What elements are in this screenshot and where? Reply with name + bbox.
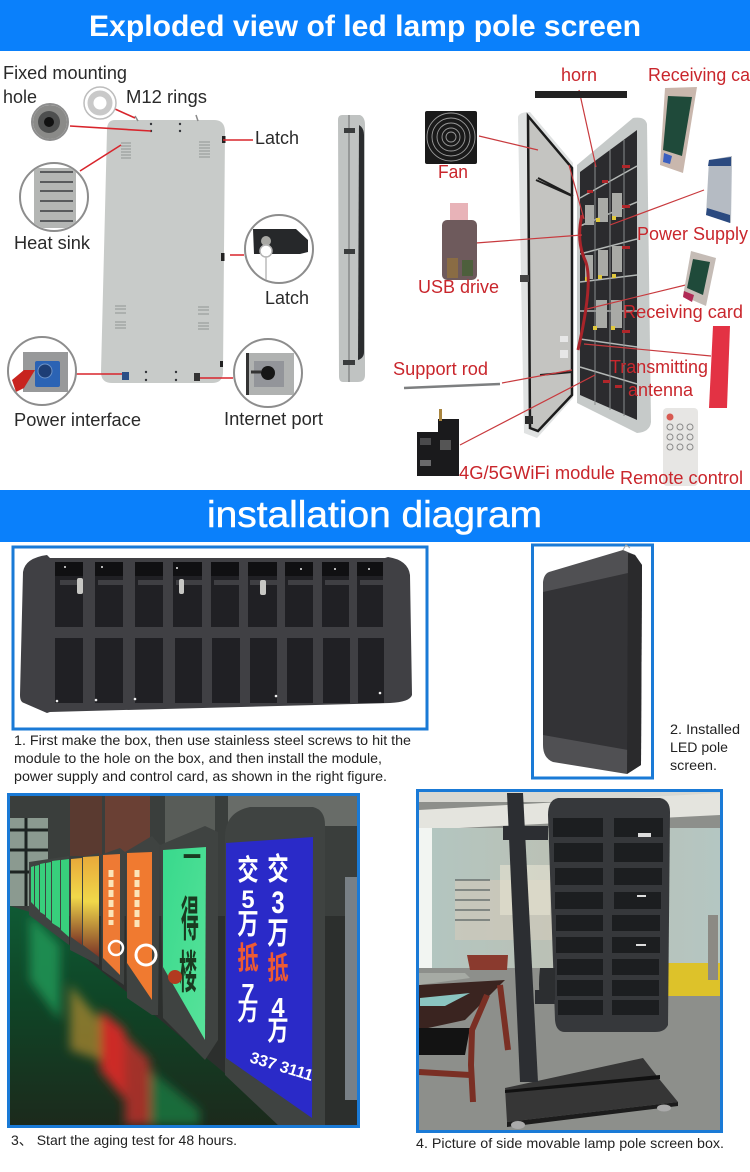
label: latch lower: Latch — [265, 287, 309, 308]
right panel with modules — [577, 118, 651, 433]
panel: opened cabinet with components — [393, 64, 750, 488]
header: exploded view — [0, 0, 750, 51]
far right edge strip — [345, 877, 357, 1100]
panel: back view of cabinet with callouts — [3, 62, 365, 430]
side view of cabinet — [338, 115, 365, 382]
component: fan — [425, 111, 477, 164]
blue screen: 交 — [237, 855, 259, 887]
label: WiFi module: 4G/5GWiFi module — [459, 462, 615, 483]
label: horn: horn — [561, 64, 597, 85]
blue screen: 3 — [271, 885, 285, 920]
caption: step 1: 1. First make the box, then use stainless steel screws to hit the — [14, 732, 411, 748]
label: heat sink: Heat sink — [14, 232, 91, 253]
caption: step 2: screen. — [670, 757, 717, 773]
panel: step 1 empty box photo — [13, 547, 427, 729]
label: remote control: Remote control — [620, 467, 743, 488]
label: antenna: antenna — [628, 379, 694, 400]
blue screen: 5 — [241, 886, 255, 914]
caption: step 1: power supply and control card, as shown in the right figure. — [14, 768, 387, 784]
blue screen — [226, 837, 315, 1118]
component: remote control — [663, 408, 698, 486]
label: hole: hole — [3, 86, 37, 107]
label: internet port: Internet port — [224, 408, 323, 429]
back housing — [101, 115, 226, 383]
office background — [419, 792, 720, 996]
wheeled base — [505, 1058, 678, 1129]
component: receiving card middle — [683, 251, 716, 306]
green screen: 得 — [181, 892, 199, 947]
callout lines — [70, 109, 253, 378]
component: receiving card top — [660, 87, 697, 173]
icon: M12 ring — [84, 87, 116, 119]
component: transmitting antenna — [709, 326, 730, 408]
label: power interface: Power interface — [14, 409, 141, 430]
blue screen: 万 — [267, 1017, 289, 1047]
caption: step 3: 3、 Start the aging test for 48 hours. — [11, 1132, 237, 1148]
caption: step 2: LED pole — [670, 739, 728, 755]
label: support rod: Support rod — [393, 358, 488, 379]
caption: step 2 — [670, 721, 740, 773]
label: fan: Fan — [438, 161, 468, 182]
component: USB drive — [442, 203, 477, 280]
pole — [503, 793, 555, 1082]
blue screen: 7 — [241, 979, 255, 1009]
icon: heat sink closeup — [20, 163, 88, 231]
table and chairs — [419, 955, 508, 1102]
label: transmitting: Transmitting — [610, 356, 708, 377]
label: fixed mounting hole: Fixed mounting — [3, 62, 127, 83]
blue screen: 抵 — [237, 941, 259, 976]
green screen — [163, 843, 206, 1040]
panel: step 4 movable box photo — [418, 790, 722, 1132]
caption: step 1: module to the hole on the box, and then install the module, — [14, 750, 382, 766]
blue screen: 337 3111 — [248, 1050, 315, 1085]
caption: step 1 — [14, 732, 411, 784]
label: receiving card middle: Receiving card — [623, 301, 743, 322]
label: power supply: Power Supply — [637, 223, 749, 244]
cabinet back frame — [20, 555, 412, 713]
header: installation diagram — [0, 490, 750, 542]
label: USB drive: USB drive — [418, 276, 499, 297]
factory background — [10, 796, 357, 1125]
component: WiFi module — [417, 409, 459, 476]
header: installation diagram: installation diagram — [207, 494, 542, 535]
blue screen: 交 — [267, 852, 289, 887]
floor reflections — [30, 915, 200, 1125]
yellow screens — [71, 856, 99, 957]
green screen: 一 — [183, 843, 201, 875]
caption: step 2: 2. Installed — [670, 721, 740, 737]
blue screen: 4 — [271, 993, 285, 1023]
orange screens — [103, 852, 156, 1000]
installed LED screen — [543, 545, 642, 774]
left door of opened cabinet — [518, 112, 573, 438]
blue screen: 万 — [267, 916, 289, 951]
header: exploded view: Exploded view of led lamp pole screen — [89, 10, 641, 43]
panel: step 2 installed screen photo — [532, 545, 652, 778]
icon: power interface closeup — [8, 337, 76, 405]
icon: mounting hole — [30, 104, 70, 140]
icon: latch closeup — [245, 215, 313, 286]
caption: step 4: 4. Picture of side movable lamp pole screen box. — [416, 1135, 724, 1151]
component: power supply — [706, 156, 732, 223]
component: horn — [535, 91, 627, 98]
cabinet back — [539, 798, 670, 1032]
red callout lines — [460, 90, 711, 445]
blue screen: 抵 — [267, 951, 289, 986]
component: support rod — [404, 384, 500, 388]
row of cabinets — [29, 807, 325, 1127]
label: M12 rings: M12 rings — [126, 86, 207, 107]
icon: internet port closeup — [234, 339, 302, 407]
label: latch top: Latch — [255, 127, 299, 148]
distant green screens — [31, 859, 69, 937]
green screen: 楼 — [179, 949, 197, 999]
blue screen: 万 — [237, 997, 259, 1025]
panel: step 3 aging test photo — [8, 794, 358, 1127]
blue screen: 万 — [237, 909, 259, 941]
